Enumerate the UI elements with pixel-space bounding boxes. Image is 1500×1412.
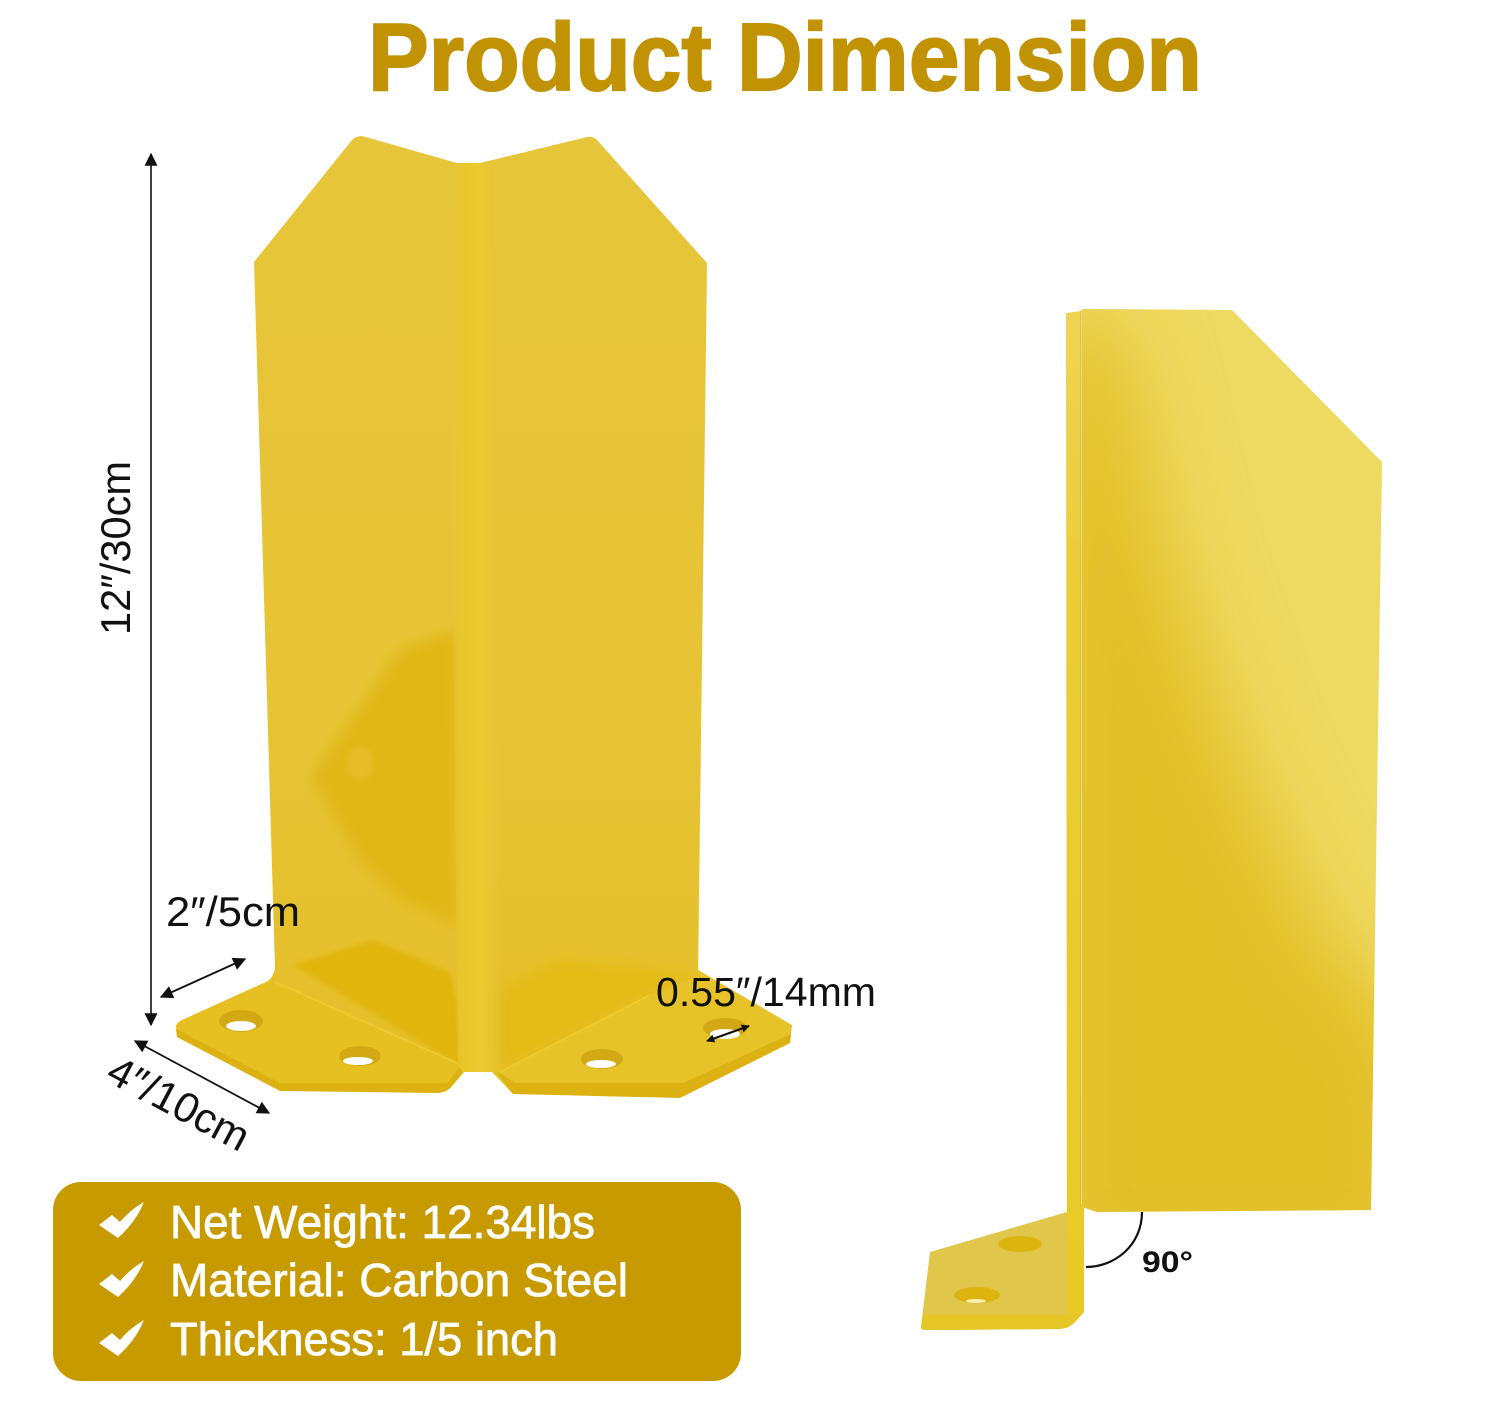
panel background [53, 1182, 741, 1381]
flange width label: 2″/5cm [166, 888, 300, 935]
spec: material: Material: Carbon Steel [170, 1254, 628, 1306]
title: Product Dimension [368, 4, 1202, 111]
side view edge strip [1066, 311, 1084, 1316]
left guard foot plates [176, 965, 792, 1098]
spec: net weight: Net Weight: 12.34lbs [170, 1196, 595, 1248]
90 degree label: 90° [1142, 1246, 1193, 1279]
side view foot holes [954, 1236, 1042, 1303]
lower left shadow [293, 940, 460, 1066]
left guard mounting holes [219, 1010, 747, 1069]
specifications panel [53, 1182, 741, 1381]
left guard shading and reflections [293, 163, 698, 1072]
flange width arrow [161, 959, 245, 997]
side view main panel [1082, 309, 1382, 1212]
left guard main column [254, 136, 707, 1072]
check icon: material [99, 1261, 144, 1297]
height arrow [150, 154, 152, 1025]
hole diameter label: 0.55″/14mm [656, 969, 876, 1015]
base width label: 4″/10cm [100, 1046, 258, 1160]
left guard product photo [176, 136, 792, 1098]
spec: thickness: Thickness: 1/5 inch [170, 1313, 558, 1365]
check icon: net weight [99, 1202, 144, 1238]
hole diameter arrow [707, 1026, 749, 1041]
center fold [458, 163, 486, 1072]
90 degree arc [1086, 1212, 1142, 1267]
height label: 12″/30cm [92, 461, 139, 635]
left guard crease lines [275, 982, 650, 1072]
side view foot plate [921, 1212, 1084, 1330]
base width arrow [135, 1041, 269, 1113]
lower right shadow [500, 960, 698, 1072]
reflected hole [347, 746, 373, 780]
panel saturated shading [1082, 309, 1376, 1212]
check icon: thickness [99, 1320, 144, 1356]
reflection on left panel [312, 630, 457, 925]
side view strip seam [1080, 310, 1082, 1206]
right guard side view photo [921, 300, 1420, 1330]
